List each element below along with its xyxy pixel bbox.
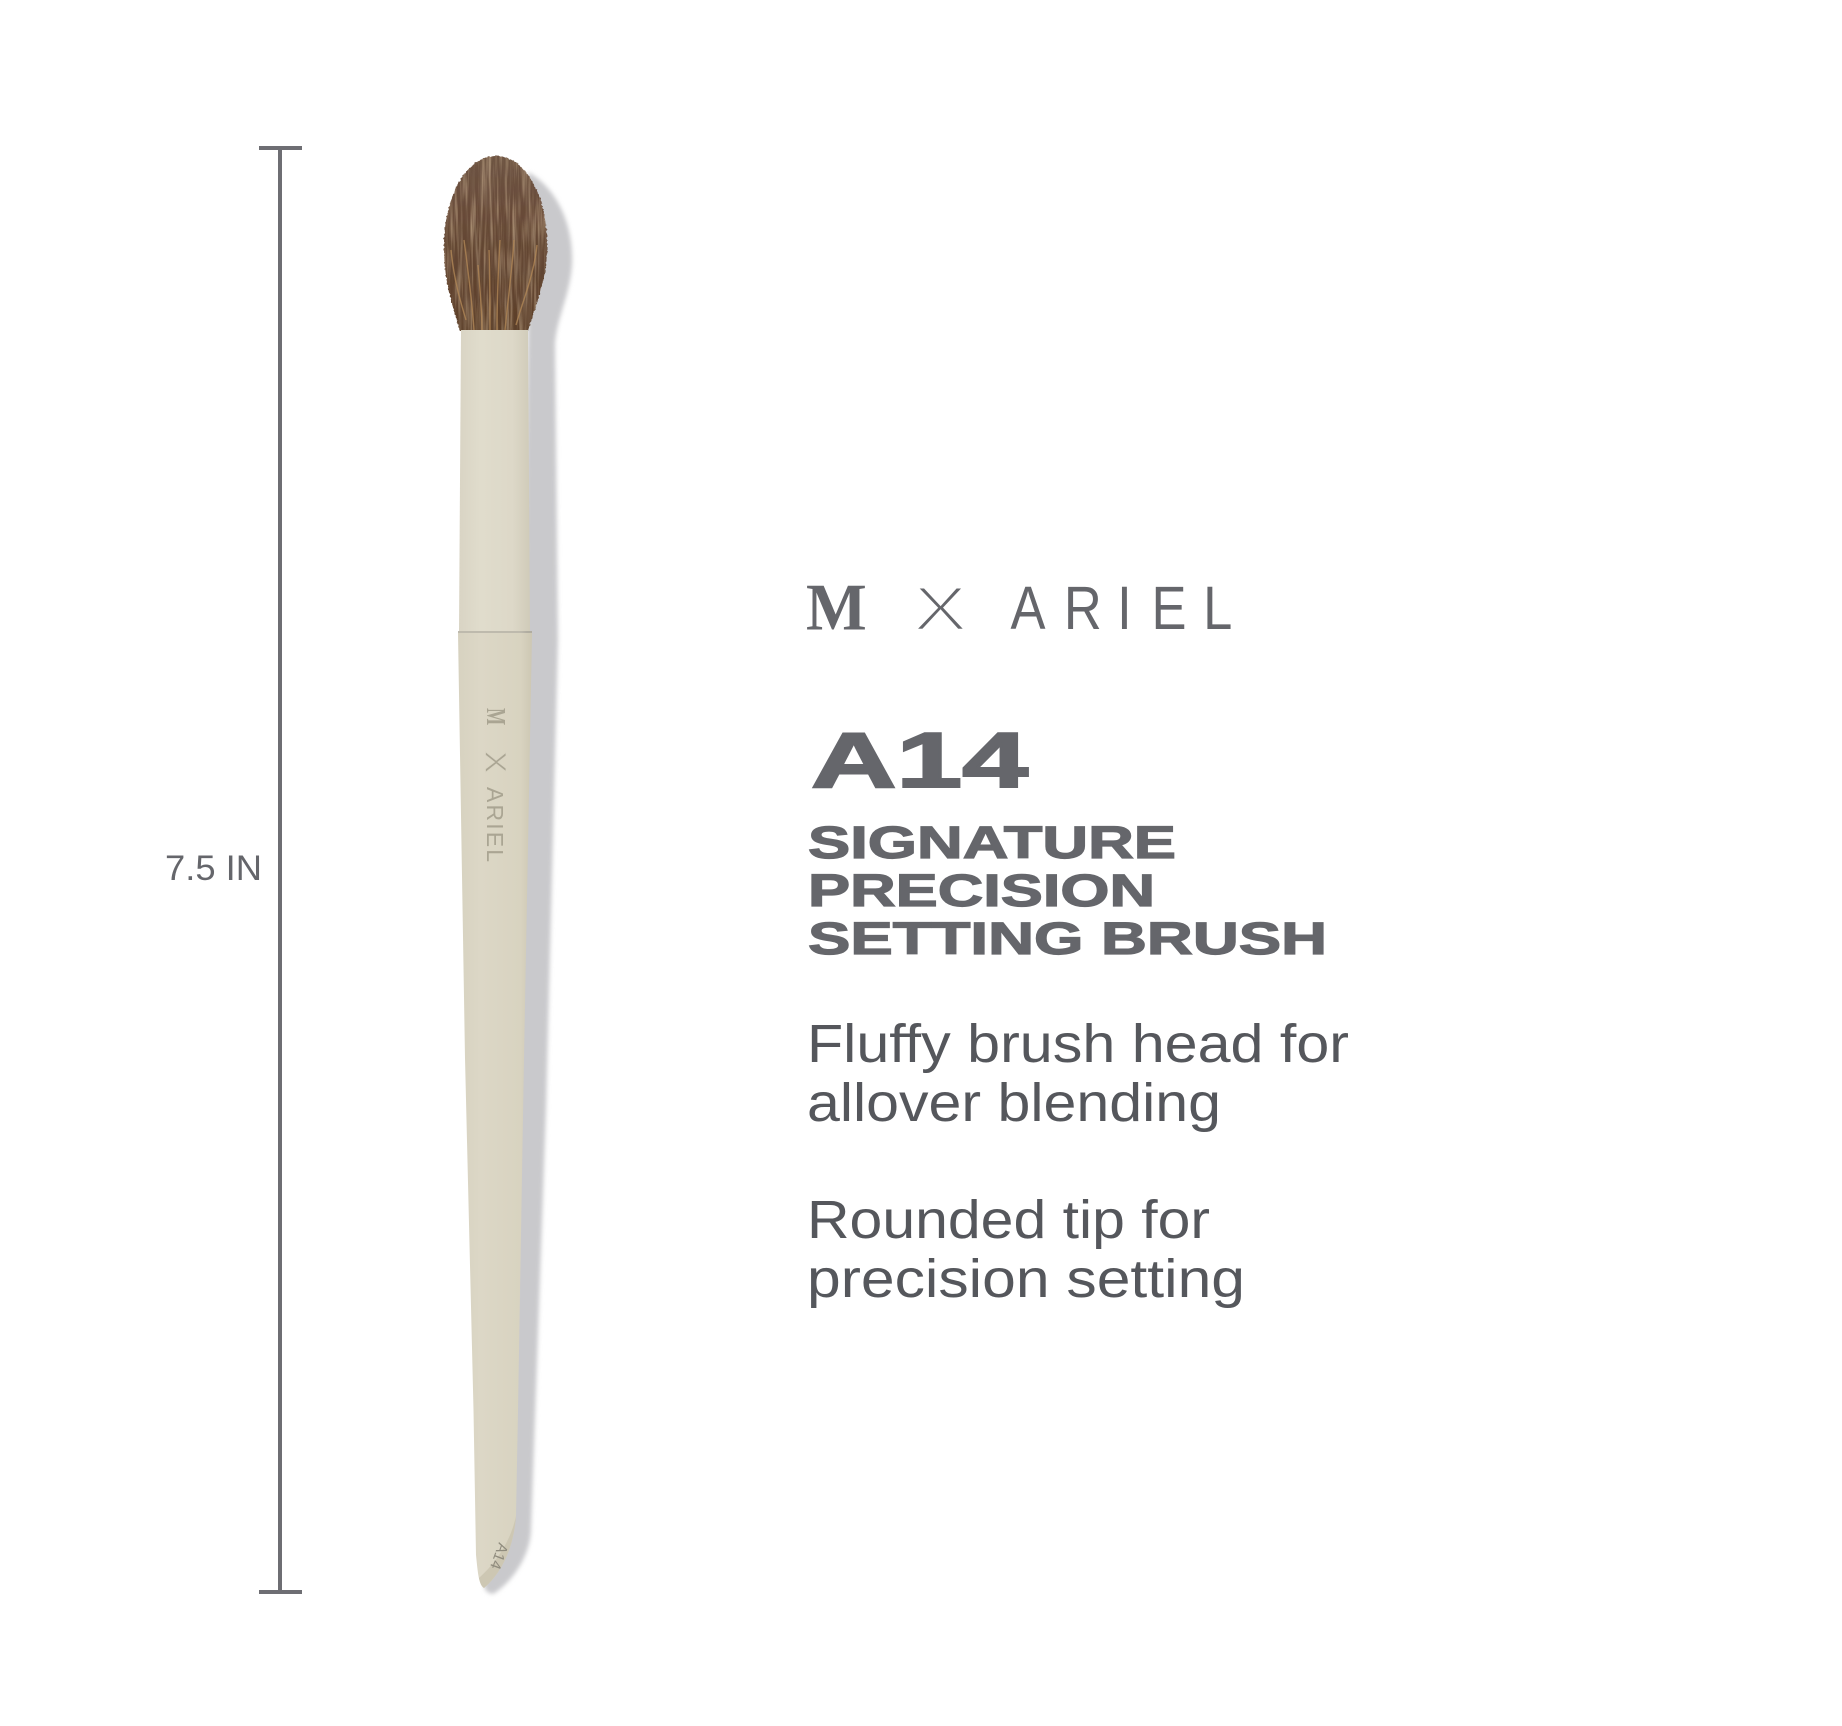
brush lower handle — [458, 633, 532, 1588]
engraved model number on tip: A14 — [486, 1541, 511, 1572]
dimension label: 7.5 IN — [165, 849, 262, 888]
engraved logo on handle — [479, 708, 513, 862]
infographic canvas — [166, 146, 1348, 1596]
handle seam — [458, 631, 532, 633]
description: rounded tip: Rounded tip for — [807, 1190, 1210, 1250]
tip bevel — [479, 1516, 516, 1588]
description: brush head: allover blending — [807, 1073, 1221, 1133]
product name: PRECISION — [808, 865, 1155, 916]
brush shadow — [484, 172, 572, 1594]
dimension bracket — [259, 146, 302, 1594]
brush illustration — [440, 150, 572, 1594]
model number: A14 — [811, 716, 1028, 804]
collaboration logo: ARIEL — [1010, 574, 1232, 643]
collaboration logo: X — [913, 574, 968, 644]
collaboration logo: M — [806, 570, 867, 645]
product name — [808, 817, 1327, 964]
engraved logo on handle: X — [479, 751, 513, 773]
product name: SIGNATURE — [808, 817, 1176, 868]
collaboration logo — [806, 570, 1232, 645]
description: brush head — [807, 1014, 1349, 1133]
description: brush head: Fluffy brush head for — [807, 1014, 1349, 1074]
brush ferrule upper handle — [459, 330, 530, 631]
product name: SETTING BRUSH — [808, 913, 1327, 964]
brush hair — [443, 156, 548, 331]
description: rounded tip — [807, 1190, 1245, 1309]
engraved logo on handle: M — [481, 708, 512, 725]
engraved logo on handle: ARIEL — [482, 787, 508, 862]
description: rounded tip: precision setting — [807, 1249, 1245, 1309]
